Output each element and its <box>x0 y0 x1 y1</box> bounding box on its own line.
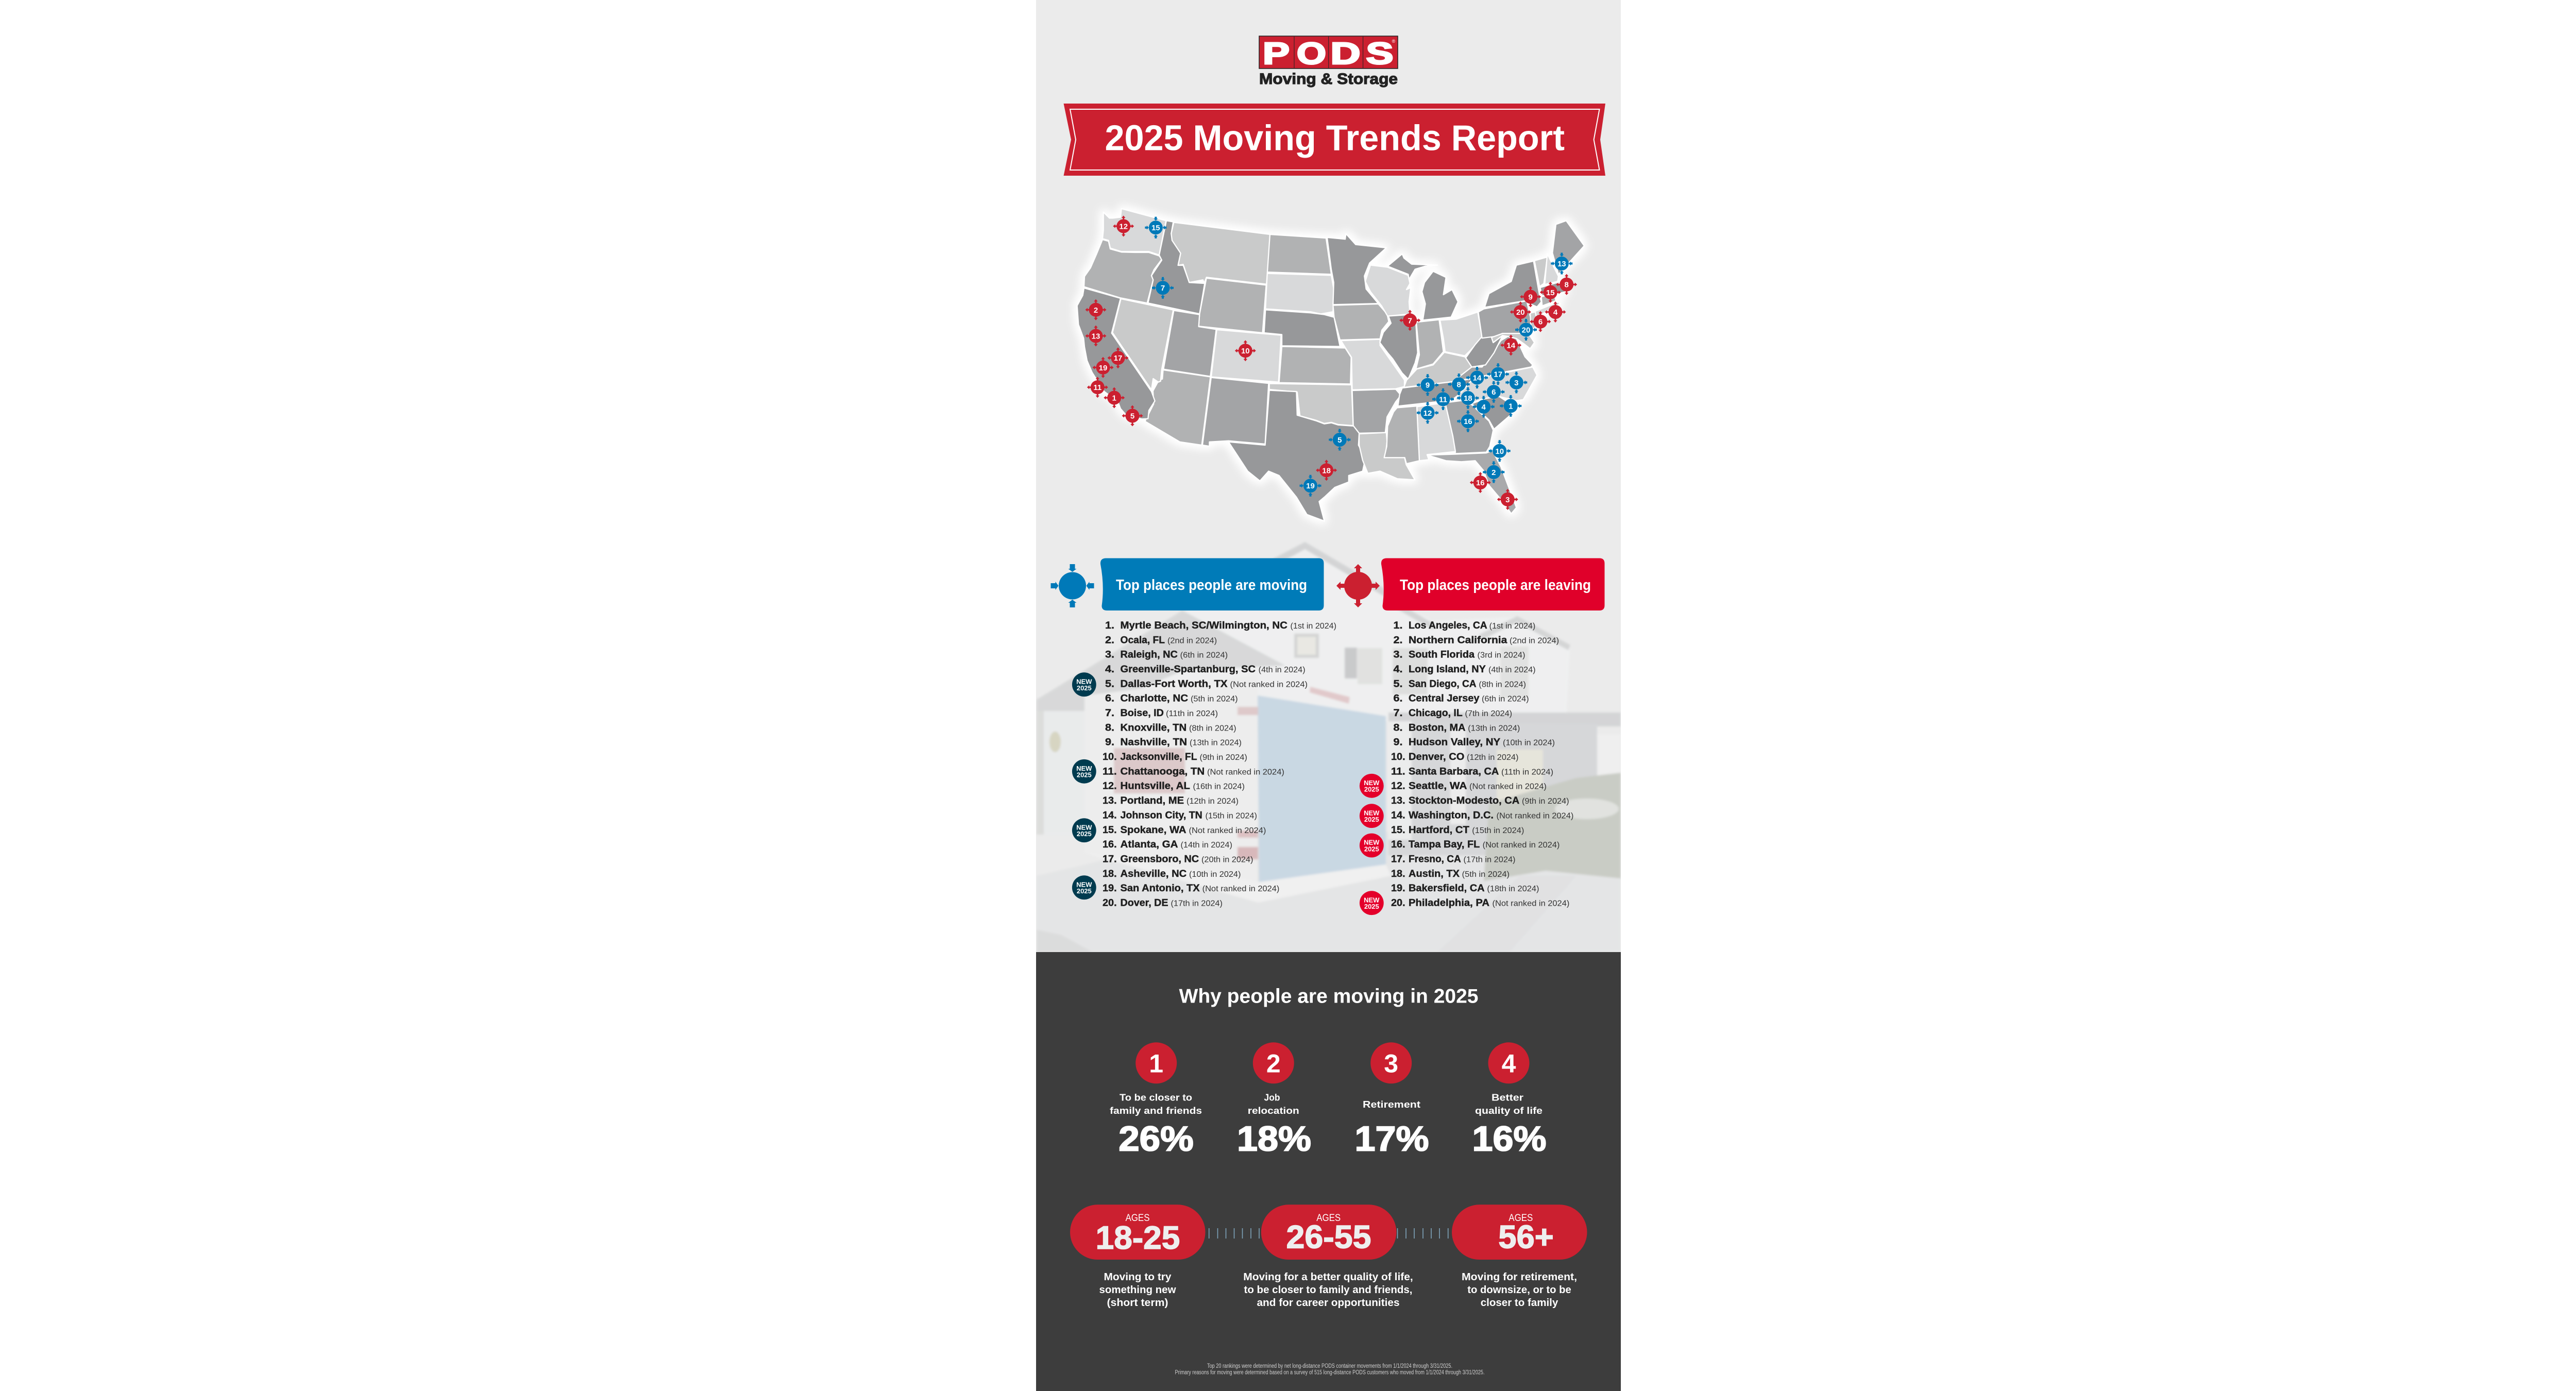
marker: leaving 13 <box>1085 326 1107 346</box>
reason 1: family and friends <box>1110 1106 1202 1116</box>
marker: leaving 19: 19 <box>1099 364 1107 372</box>
list: top places people are moving: 12. <box>1103 781 1117 792</box>
badge: Tampa Bay <box>1360 834 1384 857</box>
reason 4: Better <box>1492 1093 1523 1103</box>
logo: PODS Moving & Storage: P <box>1263 37 1290 71</box>
reason 3: Retirement <box>1363 1099 1420 1110</box>
badge: Tampa Bay: 2025 <box>1364 845 1379 853</box>
logo: PODS Moving & Storage: O <box>1297 37 1326 71</box>
list: top places people are leaving: (6th in 2024) <box>1482 695 1529 704</box>
list: top places people are leaving: (Not ranked in 2024) <box>1496 811 1573 820</box>
marker: moving 13 <box>1551 252 1572 274</box>
panel: light upper background <box>1036 0 1621 952</box>
list: top places people are leaving: (1st in 2024) <box>1489 622 1535 631</box>
list: top places people are leaving: Hudson Valley, NY <box>1409 737 1501 748</box>
marker: leaving 15: 15 <box>1546 289 1555 297</box>
marker: moving 19 <box>1299 475 1321 497</box>
marker: leaving 6: 6 <box>1538 318 1543 327</box>
reason 1 <box>1110 1042 1202 1158</box>
list: top places people are leaving: (Not ranked in 2024) <box>1469 783 1547 791</box>
badge: San Antonio: 2025 <box>1077 887 1092 895</box>
list: top places people are leaving: Chicago, IL <box>1409 708 1463 719</box>
list: top places people are leaving: 16. <box>1391 839 1405 850</box>
list: top places people are leaving: 5. <box>1393 678 1402 689</box>
list: top places people are moving: 14. <box>1103 810 1117 821</box>
marker: moving 15 <box>1145 217 1166 239</box>
list: top places people are leaving: Tampa Bay, FL <box>1409 839 1480 850</box>
reason 4: 4 <box>1502 1049 1516 1078</box>
list: top places people are leaving: 18. <box>1391 869 1405 879</box>
panel: dark lower section <box>1036 952 1621 1391</box>
marker: moving 13: 13 <box>1557 260 1566 268</box>
list: top places people are moving: Dover, DE <box>1120 897 1168 909</box>
list: top places people are leaving: San Diego, CA <box>1409 678 1477 689</box>
marker: leaving 20: 20 <box>1516 308 1525 317</box>
marker: leaving 5: 5 <box>1130 412 1134 420</box>
list: top places people are leaving: (13th in 2024) <box>1468 724 1520 733</box>
marker: moving 10 <box>1489 440 1511 462</box>
list: top places people are leaving: 4. <box>1393 664 1402 675</box>
badge: Chattanooga <box>1072 759 1096 784</box>
marker: moving 11 <box>1432 388 1454 410</box>
marker: moving 20 <box>1515 319 1537 341</box>
map markers <box>1085 215 1577 510</box>
marker: moving 17: 17 <box>1494 370 1502 379</box>
list: top places people are moving: Boise, ID <box>1120 708 1164 719</box>
list: top places people are leaving <box>1391 620 1573 909</box>
list: top places people are leaving: Philadelphia, PA <box>1409 897 1489 909</box>
marker: leaving 4: 4 <box>1553 308 1558 317</box>
list: top places people are moving: (9th in 2024) <box>1199 753 1247 762</box>
badge: Seattle <box>1360 774 1384 798</box>
age pill 18-25 <box>1070 1205 1206 1260</box>
list: top places people are moving: 1. <box>1105 620 1114 631</box>
badges: new 2025, moving list <box>1072 672 1096 900</box>
list: top places people are leaving: (18th in 2024) <box>1487 885 1539 893</box>
marker: leaving 14: 14 <box>1506 341 1516 350</box>
marker: moving 6: 6 <box>1492 388 1496 397</box>
list: top places people are moving: Johnson City, TN <box>1120 810 1202 821</box>
list: top places people are leaving: Boston, MA <box>1409 722 1466 733</box>
badge: Philadelphia <box>1360 891 1384 915</box>
list: top places people are leaving: 19. <box>1391 883 1405 894</box>
list: top places people are leaving: Stockton-Modesto, CA <box>1409 795 1520 806</box>
list: top places people are moving: 4. <box>1105 664 1114 675</box>
marker: moving 9: 9 <box>1426 381 1430 390</box>
marker: leaving 12: 12 <box>1119 223 1128 231</box>
badge: Philadelphia: 2025 <box>1364 903 1379 910</box>
reason 3: 17% <box>1355 1119 1429 1158</box>
list: top places people are leaving: (Not ranked in 2024) <box>1483 841 1560 850</box>
marker: moving 6 <box>1483 381 1504 403</box>
list: top places people are moving: (5th in 2024) <box>1191 695 1238 704</box>
badge: Dallas-Fort Worth: NEW <box>1076 677 1092 685</box>
reason 3: 3 <box>1384 1049 1398 1078</box>
list: top places people are leaving: (3rd in 2024) <box>1478 651 1525 660</box>
badge: Washington: 2025 <box>1364 816 1379 823</box>
reason 1: To be closer to <box>1120 1093 1192 1103</box>
list: top places people are moving: Portland, ME <box>1120 795 1184 806</box>
marker: moving 19: 19 <box>1306 482 1315 490</box>
badge: San Antonio <box>1072 875 1096 900</box>
badge: Philadelphia: NEW <box>1364 896 1380 904</box>
marker: moving 1: 1 <box>1509 402 1513 411</box>
list: top places people are leaving: South Florida <box>1409 650 1475 660</box>
list: top places people are moving: 16. <box>1103 839 1117 850</box>
list: top places people are moving: (Not ranked in 2024) <box>1202 885 1279 893</box>
marker: moving 5 <box>1329 429 1350 450</box>
marker: leaving 11 <box>1087 377 1108 398</box>
badge: Washington: NEW <box>1364 809 1380 817</box>
list: top places people are leaving: 7. <box>1393 708 1402 719</box>
list: top places people are leaving: (17th in 2024) <box>1463 855 1516 864</box>
logo: PODS Moving & Storage <box>1259 36 1398 88</box>
list: top places people are moving: 13. <box>1103 795 1117 806</box>
list: top places people are moving: (1st in 2024) <box>1290 622 1336 631</box>
badge: Washington <box>1360 804 1384 828</box>
marker: leaving 12 <box>1113 215 1134 237</box>
marker: moving 7 <box>1152 277 1174 299</box>
list: top places people are leaving: (12th in 2024) <box>1467 753 1518 762</box>
list: top places people are leaving: (7th in 2024) <box>1465 709 1512 718</box>
list: top places people are leaving: Northern California <box>1409 635 1507 646</box>
list: top places people are leaving: Los Angeles, CA <box>1409 620 1487 631</box>
badge: Spokane <box>1072 818 1096 842</box>
list: top places people are leaving: Fresno, CA <box>1409 854 1461 864</box>
heading: top places people are moving: Top places people are moving <box>1116 577 1307 593</box>
marker: moving 3: 3 <box>1514 379 1518 387</box>
marker: leaving 15 <box>1540 282 1561 303</box>
list: top places people are leaving: Central Jersey <box>1409 693 1480 704</box>
list: top places people are moving: 7. <box>1105 708 1114 719</box>
logo: PODS Moving & Storage: Moving & Storage <box>1259 71 1398 88</box>
marker: moving 16 <box>1457 411 1479 432</box>
heading: why people are moving: Why people are moving in 2025 <box>1179 986 1479 1008</box>
description ages 18-25: (short term) <box>1107 1297 1168 1309</box>
marker: moving 7: 7 <box>1161 284 1165 293</box>
marker: moving 5: 5 <box>1337 436 1342 445</box>
marker: moving 14: 14 <box>1473 374 1482 382</box>
marker: moving 17 <box>1487 363 1509 385</box>
list: top places people are moving: 20. <box>1103 897 1117 909</box>
marker: leaving 14 <box>1500 335 1521 355</box>
reason 2: relocation <box>1248 1106 1299 1116</box>
list: top places people are moving: Spokane, WA <box>1120 825 1187 836</box>
reason 2 <box>1237 1042 1311 1158</box>
marker: moving 12 <box>1417 402 1438 423</box>
list: top places people are moving: 2. <box>1105 635 1114 646</box>
marker: leaving 16 <box>1470 472 1491 493</box>
marker: moving 14 <box>1466 367 1488 388</box>
list: top places people are moving: (8th in 2024) <box>1189 724 1236 733</box>
reason 1: 1 <box>1149 1049 1163 1078</box>
reason 1: 26% <box>1118 1119 1194 1158</box>
title text: 2025 Moving Trends Report <box>1105 118 1565 158</box>
marker: leaving 6 <box>1530 311 1551 332</box>
description ages 18-25: something new <box>1099 1284 1176 1296</box>
list: top places people are leaving: 1. <box>1393 620 1402 631</box>
list: top places people are moving: 17. <box>1103 854 1117 864</box>
title banner <box>1063 104 1605 176</box>
list: top places people are moving: Knoxville, TN <box>1120 722 1187 733</box>
list: top places people are moving: Huntsville, AL <box>1120 781 1190 792</box>
list: top places people are leaving: (10th in 2024) <box>1503 739 1555 748</box>
badge: Tampa Bay: NEW <box>1364 839 1380 846</box>
list: top places people are leaving: (2nd in 2024) <box>1510 636 1559 645</box>
description ages 18-25: Moving to try <box>1104 1271 1172 1283</box>
description ages 56+ <box>1462 1271 1577 1309</box>
list: top places people are leaving: Austin, TX <box>1409 869 1460 879</box>
marker: leaving 1: 1 <box>1112 394 1116 403</box>
marker: leaving 2 <box>1085 299 1107 320</box>
badge: Seattle: NEW <box>1364 779 1380 787</box>
description ages 26-55: and for career opportunities <box>1257 1297 1399 1309</box>
list: top places people are moving: (6th in 2024) <box>1180 651 1228 660</box>
list: top places people are moving <box>1103 620 1336 909</box>
marker: moving 16: 16 <box>1464 417 1472 426</box>
badge: Dallas-Fort Worth: 2025 <box>1077 684 1092 692</box>
marker: moving 20: 20 <box>1522 326 1530 335</box>
list: top places people are moving: Raleigh, NC <box>1120 650 1178 660</box>
list: top places people are moving: (2nd in 2024) <box>1167 636 1217 645</box>
list: top places people are leaving: (Not ranked in 2024) <box>1492 900 1569 908</box>
background photo: house with PODS container <box>1037 542 1621 952</box>
badge: Spokane: NEW <box>1076 823 1092 831</box>
list: top places people are moving: Asheville, NC <box>1120 869 1187 879</box>
list: top places people are moving: 3. <box>1105 650 1114 660</box>
list: top places people are leaving: (4th in 2024) <box>1488 666 1536 674</box>
list: top places people are moving: 10. <box>1103 752 1117 762</box>
list: top places people are moving: Atlanta, GA <box>1120 839 1178 850</box>
description ages 18-25 <box>1099 1271 1176 1309</box>
list: top places people are leaving: 13. <box>1391 795 1405 806</box>
logo: PODS Moving & Storage: S <box>1366 37 1393 71</box>
list: top places people are leaving: Seattle, WA <box>1409 781 1467 792</box>
list: top places people are moving: 5. <box>1105 678 1114 689</box>
list: top places people are moving: Nashville, TN <box>1120 737 1187 748</box>
marker: moving 11: 11 <box>1439 395 1447 404</box>
list: top places people are moving: (14th in 2024) <box>1181 841 1232 850</box>
connector dots <box>1397 1228 1448 1239</box>
reason 2: 18% <box>1237 1119 1311 1158</box>
age pill 56+ <box>1452 1205 1587 1260</box>
marker: leaving 10 <box>1235 340 1256 361</box>
age pill 26-55: 26-55 <box>1286 1219 1371 1256</box>
heading: top places people are leaving <box>1381 558 1604 610</box>
marker: leaving 20 <box>1510 301 1531 323</box>
list: top places people are moving: (13th in 2024) <box>1190 739 1242 748</box>
list: top places people are moving: 9. <box>1105 737 1114 748</box>
badges: new 2025, leaving list <box>1360 774 1384 915</box>
marker: moving 18: 18 <box>1464 394 1472 403</box>
list: top places people are moving: 11. <box>1103 766 1117 777</box>
list: top places people are leaving: 9. <box>1393 737 1402 748</box>
description ages 26-55: Moving for a better quality of life, <box>1243 1271 1413 1283</box>
marker: leaving 18 <box>1316 460 1337 481</box>
marker: moving 1 <box>1500 395 1521 417</box>
marker: leaving 7 <box>1399 310 1420 331</box>
marker: moving 3 <box>1505 371 1527 393</box>
list: top places people are leaving: 6. <box>1393 693 1402 704</box>
reason 4: 16% <box>1472 1119 1547 1158</box>
badge: Chattanooga: 2025 <box>1077 771 1092 779</box>
heading: top places people are leaving: Top places people are leaving <box>1400 577 1591 593</box>
list: top places people are moving: (Not ranked in 2024) <box>1207 768 1284 776</box>
list: top places people are moving: 8. <box>1105 722 1114 733</box>
marker: leaving 7: 7 <box>1408 316 1412 325</box>
marker: leaving 19 <box>1092 357 1114 378</box>
age pill 56+: AGES <box>1509 1213 1533 1224</box>
list: top places people are moving: Greenville-Spartanburg, SC <box>1120 664 1256 675</box>
list: top places people are moving: (17th in 2024) <box>1171 900 1223 908</box>
marker: leaving 8: 8 <box>1565 281 1569 290</box>
description ages 56+: closer to family <box>1481 1297 1558 1309</box>
icon: moving out arrows <box>1336 564 1380 607</box>
list: top places people are moving: (Not ranked in 2024) <box>1230 680 1308 689</box>
icon: moving in arrows <box>1051 564 1094 607</box>
footnotes: Top 20 rankings were determined by net long-distance PODS container movements from 1/1/2024 through 3/31/2025. <box>1207 1363 1452 1369</box>
list: top places people are leaving: (11th in 2024) <box>1501 768 1553 776</box>
reason 4 <box>1472 1042 1547 1158</box>
marker: moving 2 <box>1483 461 1504 483</box>
badge: Chattanooga: NEW <box>1076 765 1092 772</box>
list: top places people are leaving: (8th in 2024) <box>1479 680 1526 689</box>
list: top places people are moving: Myrtle Beach, SC/Wilmington, NC <box>1120 620 1287 631</box>
list: top places people are leaving: 12. <box>1391 781 1405 792</box>
connector dots <box>1209 1228 1259 1239</box>
marker: moving 12: 12 <box>1423 409 1432 418</box>
list: top places people are leaving: (15th in 2024) <box>1472 826 1524 835</box>
marker: leaving 4 <box>1545 301 1566 323</box>
list: top places people are leaving: 8. <box>1393 722 1402 733</box>
marker: leaving 8 <box>1556 274 1577 295</box>
marker: moving 4 <box>1473 396 1495 417</box>
marker: leaving 17 <box>1108 347 1128 368</box>
list: top places people are moving: (15th in 2024) <box>1206 811 1257 820</box>
reason 4: quality of life <box>1475 1106 1543 1116</box>
age pill 26-55 <box>1261 1205 1396 1260</box>
marker: leaving 13: 13 <box>1092 332 1100 341</box>
list: top places people are moving: 6. <box>1105 693 1114 704</box>
list: top places people are leaving: Santa Barbara, CA <box>1409 766 1499 777</box>
list: top places people are moving: (4th in 2024) <box>1259 666 1306 674</box>
marker: leaving 3 <box>1497 489 1518 510</box>
list: top places people are moving: (11th in 2024) <box>1166 709 1218 718</box>
marker: moving 10: 10 <box>1495 447 1504 456</box>
list: top places people are leaving: 11. <box>1391 766 1405 777</box>
list: top places people are leaving: 15. <box>1391 825 1405 836</box>
marker: leaving 10: 10 <box>1241 347 1250 355</box>
reason 2: Job <box>1264 1093 1280 1103</box>
marker: moving 8: 8 <box>1457 380 1461 389</box>
list: top places people are moving: Ocala, FL <box>1120 635 1165 646</box>
marker: leaving 5 <box>1122 405 1143 427</box>
marker: moving 15: 15 <box>1151 224 1160 232</box>
list: top places people are leaving: 2. <box>1393 635 1402 646</box>
age pill 18-25: AGES <box>1125 1213 1150 1224</box>
marker: leaving 16: 16 <box>1476 479 1485 487</box>
list: top places people are leaving: Denver, CO <box>1409 752 1464 762</box>
marker: leaving 9: 9 <box>1529 293 1533 302</box>
marker: leaving 17: 17 <box>1114 354 1122 363</box>
list: top places people are moving: (12th in 2024) <box>1187 797 1239 806</box>
marker: moving 4: 4 <box>1482 403 1486 412</box>
age pill 18-25: 18-25 <box>1096 1220 1180 1256</box>
list: top places people are moving: 15. <box>1103 825 1117 836</box>
list: top places people are leaving: (5th in 2024) <box>1462 870 1510 879</box>
marker: moving 2: 2 <box>1492 468 1496 477</box>
marker: leaving 2: 2 <box>1094 306 1098 315</box>
description ages 56+: to downsize, or to be <box>1467 1284 1571 1296</box>
list: top places people are moving: Chattanooga, TN <box>1120 766 1205 777</box>
list: top places people are leaving: 20. <box>1391 897 1405 909</box>
list: top places people are leaving: 17. <box>1391 854 1405 864</box>
list: top places people are leaving: 10. <box>1391 752 1405 762</box>
list: top places people are moving: 19. <box>1103 883 1117 894</box>
age pill 56+: 56+ <box>1498 1219 1554 1256</box>
heading: top places people are moving <box>1100 558 1324 610</box>
list: top places people are moving: (10th in 2024) <box>1189 870 1241 879</box>
list: top places people are moving: San Antonio, TX <box>1120 883 1200 894</box>
list: top places people are leaving: Bakersfield, CA <box>1409 883 1485 894</box>
age pill 26-55: AGES <box>1316 1213 1341 1224</box>
description ages 26-55 <box>1243 1271 1413 1309</box>
list: top places people are leaving: Long Island, NY <box>1409 664 1486 675</box>
logo: PODS Moving & Storage: ® <box>1392 39 1396 44</box>
description ages 26-55: to be closer to family and friends, <box>1244 1284 1413 1296</box>
footnotes <box>1175 1363 1485 1376</box>
badge: San Antonio: NEW <box>1076 880 1092 888</box>
marker: moving 18 <box>1457 387 1479 409</box>
badge: Seattle: 2025 <box>1364 786 1379 793</box>
list: top places people are moving: 18. <box>1103 869 1117 879</box>
reason 2: 2 <box>1266 1049 1281 1078</box>
logo: PODS Moving & Storage: D <box>1330 37 1360 71</box>
marker: leaving 18: 18 <box>1322 466 1331 475</box>
list: top places people are moving: Dallas-Fort Worth, TX <box>1120 678 1228 689</box>
list: top places people are moving: Greensboro, NC <box>1120 854 1199 864</box>
list: top places people are leaving: 3. <box>1393 650 1402 660</box>
badge: Dallas-Fort Worth <box>1072 672 1096 697</box>
marker: moving 9 <box>1417 374 1438 396</box>
list: top places people are moving: (Not ranked in 2024) <box>1189 826 1266 835</box>
list: top places people are moving: (20th in 2024) <box>1201 855 1253 864</box>
marker: leaving 11: 11 <box>1093 383 1101 392</box>
footnotes: Primary reasons for moving were determined based on a survey of 515 long-distance PODS customers who moved from 1/1/2024 through 3/31/2025. <box>1175 1370 1485 1376</box>
list: top places people are leaving: Hartford, CT <box>1409 825 1469 836</box>
list: top places people are moving: (16th in 2024) <box>1193 783 1245 791</box>
list: top places people are moving: Jacksonville, FL <box>1120 752 1197 762</box>
marker: moving 8 <box>1448 374 1470 395</box>
list: top places people are leaving: 14. <box>1391 810 1405 821</box>
reason 3 <box>1355 1042 1429 1158</box>
list: top places people are leaving: Washington, D.C. <box>1409 810 1494 821</box>
badge: Spokane: 2025 <box>1077 830 1092 838</box>
US map with state shapes <box>1077 209 1584 521</box>
marker: leaving 9 <box>1520 286 1541 307</box>
description ages 56+: Moving for retirement, <box>1462 1271 1577 1283</box>
list: top places people are moving: Charlotte, NC <box>1120 693 1188 704</box>
marker: leaving 3: 3 <box>1505 496 1510 504</box>
list: top places people are leaving: (9th in 2024) <box>1522 797 1569 806</box>
marker: leaving 1 <box>1104 387 1125 408</box>
